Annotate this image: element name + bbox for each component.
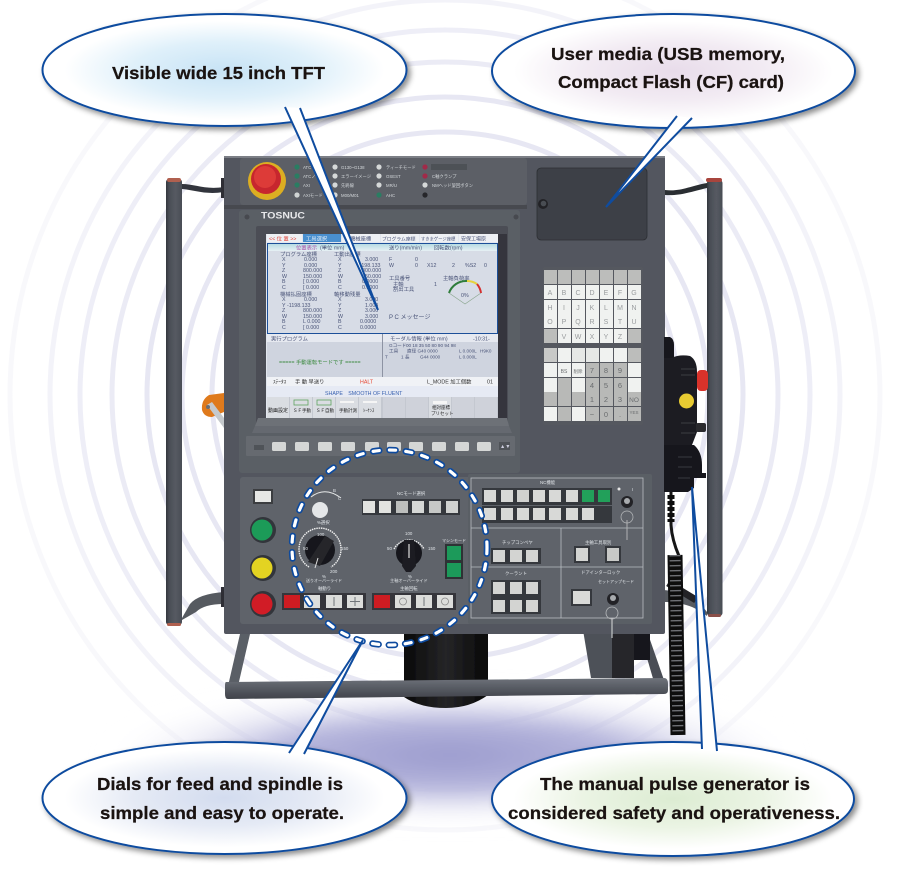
status row: L_MODE 加工個数 <box>427 378 472 386</box>
spindle override dial <box>387 531 436 584</box>
indicator labels: ATC <box>303 165 311 170</box>
position display panel: 800.000 <box>362 268 381 274</box>
position display panel: L 0.000 <box>303 319 321 325</box>
program and modal info: T <box>385 354 388 360</box>
keyboard letters: P <box>562 319 567 326</box>
screen tabs: プログラム座標 <box>382 236 416 242</box>
keyboard letter keys <box>544 285 641 343</box>
position display panel: 軸移動残量 <box>334 290 361 298</box>
position display panel: Y <box>338 303 342 309</box>
position display panel: 150.000 <box>362 274 381 280</box>
keyboard letters: T <box>618 319 623 326</box>
position display panel: 0.000 <box>304 297 317 303</box>
keyboard letters: Y <box>604 334 609 341</box>
screen tabs: 機械座標 <box>350 234 372 242</box>
position display panel: 0 <box>415 257 418 263</box>
soft keys: ＳＦ手動 <box>293 407 311 414</box>
spindle tool keys: 主軸工具取別 <box>585 539 611 546</box>
status row: ｽﾃｰﾀｽ <box>273 378 287 386</box>
door interlock key and key switch <box>571 569 634 638</box>
spindle rotation buttons <box>372 585 456 610</box>
axis jog buttons <box>282 585 366 610</box>
keyboard letters: A <box>548 290 553 297</box>
dashed highlight circle <box>292 450 487 645</box>
position display panel: W <box>338 314 343 320</box>
position display panel: Y <box>282 303 286 309</box>
function key strip <box>246 436 515 456</box>
keyboard letters: E <box>604 290 609 297</box>
keyboard letters: C <box>575 290 581 297</box>
position display panel: -1198.133 <box>287 303 311 309</box>
main cabinet body <box>224 156 665 634</box>
position display panel: Y <box>282 263 286 269</box>
position display panel: X <box>282 297 286 303</box>
position display panel: X <box>338 297 342 303</box>
soft keys: ｼｰｹﾝｽ <box>363 408 375 413</box>
keyboard letters: S <box>604 319 609 326</box>
position display panel: 0 <box>415 263 418 269</box>
keyboard letters: X <box>590 334 595 341</box>
keyboard lower block: 5 <box>604 381 608 390</box>
keyboard letters: Z <box>618 334 623 341</box>
icon: emergency stop button <box>248 162 286 200</box>
keyboard letters: H <box>547 305 553 312</box>
selector switch <box>311 488 341 526</box>
keyboard lower block: 3 <box>618 395 622 404</box>
keyboard lower block <box>544 348 641 421</box>
keyboard letters: F <box>618 290 622 297</box>
orange lever <box>202 393 224 428</box>
door interlock key and key switch: ドアインターロック <box>581 569 620 576</box>
TFT screen <box>266 234 498 418</box>
callout text <box>551 44 785 92</box>
callout: user media <box>492 14 855 207</box>
background: purple floor glow <box>100 687 800 823</box>
feed override dial <box>299 528 349 583</box>
indicator labels: G130~G138 <box>341 165 365 170</box>
spindle override dial: 150 <box>428 546 436 551</box>
position display panel: %S2 <box>465 263 476 269</box>
NC function keys <box>482 479 612 523</box>
spindle tool keys <box>574 539 621 563</box>
keyboard lower block: BS <box>561 369 568 375</box>
feed override dial: 100 <box>317 532 325 537</box>
callout: TFT screen <box>42 14 406 310</box>
position display panel: X <box>338 257 342 263</box>
position display panel: P C メッセージ <box>389 314 430 321</box>
screen tabs: 安保工場原 <box>461 236 486 242</box>
position display panel: 0.0000 <box>360 319 376 325</box>
pointer: to media lid <box>606 116 692 207</box>
position display panel: 800.000 <box>303 268 322 274</box>
program and modal info <box>267 334 498 385</box>
selector switch: B <box>333 488 336 493</box>
callout text: Visible wide 15 inch TFT <box>112 63 325 83</box>
program and modal info: 実行プログラム <box>271 334 308 342</box>
keyboard letters: N <box>631 305 637 312</box>
load gauge: 0% <box>461 293 469 299</box>
machine mode buttons <box>442 538 466 579</box>
keyboard letters: R <box>589 319 595 326</box>
feed override dial: 200 <box>330 569 338 574</box>
selector switch: %選択 <box>317 519 330 526</box>
position display panel: Y <box>338 263 342 269</box>
screen tabs <box>267 234 498 242</box>
position display panel <box>267 243 498 334</box>
position display panel: C <box>282 325 286 331</box>
keyboard letters: Q <box>575 319 581 326</box>
keyboard letters: K <box>590 305 595 312</box>
callout: dials <box>42 640 406 854</box>
soft keys: 手動計測 <box>339 407 357 414</box>
keyboard lower block: 2 <box>604 395 608 404</box>
indicator labels <box>303 165 473 198</box>
status row: 手 動 早送り <box>295 378 324 386</box>
position display panel: C <box>338 285 342 291</box>
indicator labels: AXIモード <box>303 193 323 198</box>
soft keys <box>267 397 498 418</box>
position display panel: Z <box>282 308 286 314</box>
position display panel: 機械払固座標 <box>280 290 312 298</box>
status row: SHAPE SMOOTH OF FLUENT <box>325 391 403 397</box>
position display panel: 0.0000 <box>362 285 378 291</box>
position display panel: 位置表示 <box>296 244 317 252</box>
top indicator strip <box>224 156 665 209</box>
indicator labels: C軸クランプ <box>432 173 457 180</box>
keyboard letters: D <box>589 290 595 297</box>
position display panel: B <box>338 319 342 325</box>
position display panel: 主軸負荷率 <box>443 274 470 282</box>
cycle buttons <box>250 489 276 617</box>
feed override dial: 150 <box>341 546 349 551</box>
load gauge <box>449 281 481 304</box>
position display panel: X <box>282 257 286 263</box>
position display panel: 3.000 <box>365 314 378 320</box>
position display panel: プログラム座標 <box>280 250 318 258</box>
callout text: The manual pulse generator is <box>540 774 810 794</box>
keyboard row 1: gray function keys <box>544 270 641 284</box>
position display panel: Z <box>282 268 286 274</box>
position display panel: W <box>389 263 394 269</box>
position display panel: B <box>282 279 286 285</box>
NC mode select: NCモード選択 <box>397 490 426 497</box>
position display panel: 2 <box>452 263 455 269</box>
TFT bezel <box>239 210 520 473</box>
callout text <box>508 774 840 823</box>
position display panel: B <box>282 319 286 325</box>
callout text: considered safety and operativeness. <box>508 803 840 823</box>
callout: pulse generator <box>492 487 854 856</box>
position display panel: 工具番号 <box>389 275 411 282</box>
key switch: edit <box>618 487 633 540</box>
program and modal info: Gコード <box>389 343 406 348</box>
coolant keys <box>491 571 541 614</box>
indicator labels: NMヘッド旋回ボタン <box>432 182 473 189</box>
position display panel: 主軸 <box>393 280 404 288</box>
position display panel: 0.0000 <box>362 279 378 285</box>
position display panel: [ 0.000 <box>303 325 319 331</box>
indicator labels: MR/U <box>386 183 397 188</box>
program and modal info: ===== 手動運転モードです ===== <box>279 358 361 366</box>
screen tabs: << 位 置 >> <box>269 234 296 242</box>
position display panel: [ 0.000 <box>303 285 319 291</box>
indicator labels: ATCノ <box>303 174 316 179</box>
keyboard lower block: 7 <box>590 366 594 375</box>
keyboard <box>543 267 643 425</box>
position display panel: 150.000 <box>303 314 322 320</box>
position display panel: 3.000 <box>365 257 378 263</box>
screen tabs: 工具選択 <box>306 234 328 242</box>
position display panel: 800.000 <box>303 308 322 314</box>
keyboard lower block: 4 <box>590 381 594 390</box>
callout text: simple and easy to operate. <box>100 803 344 823</box>
position display panel: 割出工具 <box>393 285 415 293</box>
indicator labels: M00/M01 <box>341 193 360 198</box>
indicator labels: エラーイメージ <box>341 174 372 180</box>
chip conveyor keys: チップコンベヤ <box>502 540 533 546</box>
selector switch: C <box>338 496 341 501</box>
program and modal info: L 0.000L <box>459 354 477 360</box>
program and modal info: G44 0000 <box>420 354 441 360</box>
indicator labels: ティーチモード <box>386 165 416 171</box>
program and modal info: H9K0 <box>480 348 492 354</box>
keyboard lower block: 削除 <box>574 368 583 374</box>
soft keys: 動画設定 <box>268 407 288 414</box>
keyboard lower block: − <box>590 410 595 419</box>
soft keys: ＳＦ自動 <box>316 407 334 414</box>
keyboard letters: W <box>575 334 582 341</box>
chip conveyor keys <box>491 540 541 564</box>
position display panel: C <box>282 285 286 291</box>
lower right control block <box>468 474 652 638</box>
position display panel: 0 <box>484 263 487 269</box>
user media lid <box>537 168 647 240</box>
indicator labels: OSEST <box>386 174 401 179</box>
keyboard lower block: . <box>619 410 621 419</box>
lower left control plate <box>240 477 480 624</box>
position display panel: W <box>338 274 343 280</box>
position display panel: 1 <box>434 282 437 288</box>
keyboard letters <box>547 290 637 341</box>
position display panel: 0.000 <box>304 263 317 269</box>
door interlock key and key switch: セットアップモード <box>598 578 634 584</box>
callout text <box>97 774 344 823</box>
position display panel: 0.0000 <box>360 325 376 331</box>
pointer: to pendant <box>692 487 717 751</box>
feed override dial: % <box>322 574 326 579</box>
NC mode select <box>362 490 460 515</box>
program and modal info: 00 18 35 50 80 90 94 98 <box>406 343 456 348</box>
position display panel: 3.000 <box>365 297 378 303</box>
spindle override dial: 50 <box>387 546 392 551</box>
program and modal info: L 0.000L <box>459 348 477 354</box>
position display panel: 1.000 <box>365 303 378 309</box>
position display panel: Z <box>338 308 342 314</box>
indicator labels: AXI <box>303 183 310 188</box>
indicator labels: 先終線 <box>341 182 355 189</box>
feed override dial: 送りオーバーライド <box>306 577 342 583</box>
position display panel: W <box>282 274 287 280</box>
soft keys: プリセット <box>431 411 454 417</box>
position display panel: 送り(mm/min) <box>389 244 422 252</box>
position display panel: 回転数(rpm) <box>434 244 463 252</box>
keyboard letters: U <box>631 319 637 326</box>
program and modal info: 工具 <box>389 348 399 354</box>
program and modal info: -10:31- <box>473 336 490 342</box>
keyboard lower block: 6 <box>618 381 622 390</box>
program and modal info: モーダル情報 (単位 mm) <box>390 334 448 342</box>
machine mode buttons: マシンモード <box>442 538 466 543</box>
keyboard lower block: 8 <box>604 366 608 375</box>
position display panel: Z <box>338 268 342 274</box>
keyboard lower block: NO <box>629 397 639 404</box>
position display panel: 工動出座標 <box>334 250 361 258</box>
feed override dial: 50 <box>303 546 308 551</box>
status row: 01 <box>487 380 493 386</box>
left handle <box>166 178 225 626</box>
callout text: Compact Flash (CF) card) <box>558 72 784 92</box>
indicator labels: AHC <box>386 193 395 198</box>
pendant cable coil <box>668 492 696 735</box>
soft keys: 相対座標 <box>432 404 450 411</box>
keyboard letters: M <box>617 305 623 312</box>
indicator lamps <box>294 164 428 198</box>
machine: CNC operation panel <box>166 156 722 735</box>
keyboard lower block: YES <box>629 410 639 415</box>
position display panel: X12 <box>427 263 436 269</box>
callout text: User media (USB memory, <box>551 44 785 64</box>
position display panel: B <box>338 279 342 285</box>
position display panel: C <box>338 325 342 331</box>
spindle override dial: 主軸オーバーライド <box>390 577 428 584</box>
keyboard letters: I <box>563 305 565 312</box>
keyboard lower block: 1 <box>590 395 594 404</box>
screen tabs: すきまゲージ座標 <box>421 236 456 242</box>
spindle override dial: 100 <box>405 531 413 536</box>
position display panel: -1198.133 <box>357 263 381 269</box>
frame uprights and foot bar <box>225 630 668 708</box>
position display panel: 150.000 <box>303 274 322 280</box>
keyboard letters: L <box>604 305 608 312</box>
callout text: Dials for feed and spindle is <box>97 774 343 794</box>
keyboard letters: J <box>576 305 580 312</box>
position display panel: F <box>389 257 393 263</box>
keyboard letters: O <box>547 319 553 326</box>
icon: manual pulse generator pendant <box>664 337 708 492</box>
spindle rotation buttons: 主軸回転 <box>400 585 418 592</box>
spindle override dial: % <box>408 574 412 579</box>
keyboard letters: V <box>562 334 567 341</box>
status row: HALT <box>360 380 374 386</box>
pointer: to dashed circle <box>289 640 363 754</box>
keyboard lower block: 9 <box>618 366 622 375</box>
TOSNUC logo: TOSNUC <box>261 210 306 220</box>
axis jog buttons: 軸動り <box>318 585 331 592</box>
status row <box>267 377 498 397</box>
right handle <box>664 178 722 617</box>
position display panel: (単位 mm) <box>320 244 345 252</box>
program and modal info: 1 長 <box>401 354 410 360</box>
coolant keys: クーラント <box>505 571 527 577</box>
key switch: edit: I <box>632 487 633 492</box>
position display panel: W <box>282 314 287 320</box>
position display panel: 0.000 <box>304 257 317 263</box>
position display panel: 3.000 <box>365 308 378 314</box>
keyboard letters: B <box>562 290 567 297</box>
keyboard lower block: 0 <box>604 410 608 419</box>
keyboard letters: G <box>631 290 637 297</box>
program and modal info: 直径 G40 0000 <box>407 348 438 354</box>
position display panel: [ 0.000 <box>303 279 319 285</box>
function key strip: ▲▼ <box>500 444 510 450</box>
NC function keys: NC機能 <box>540 479 556 486</box>
pointer: to TFT screen <box>285 107 378 310</box>
